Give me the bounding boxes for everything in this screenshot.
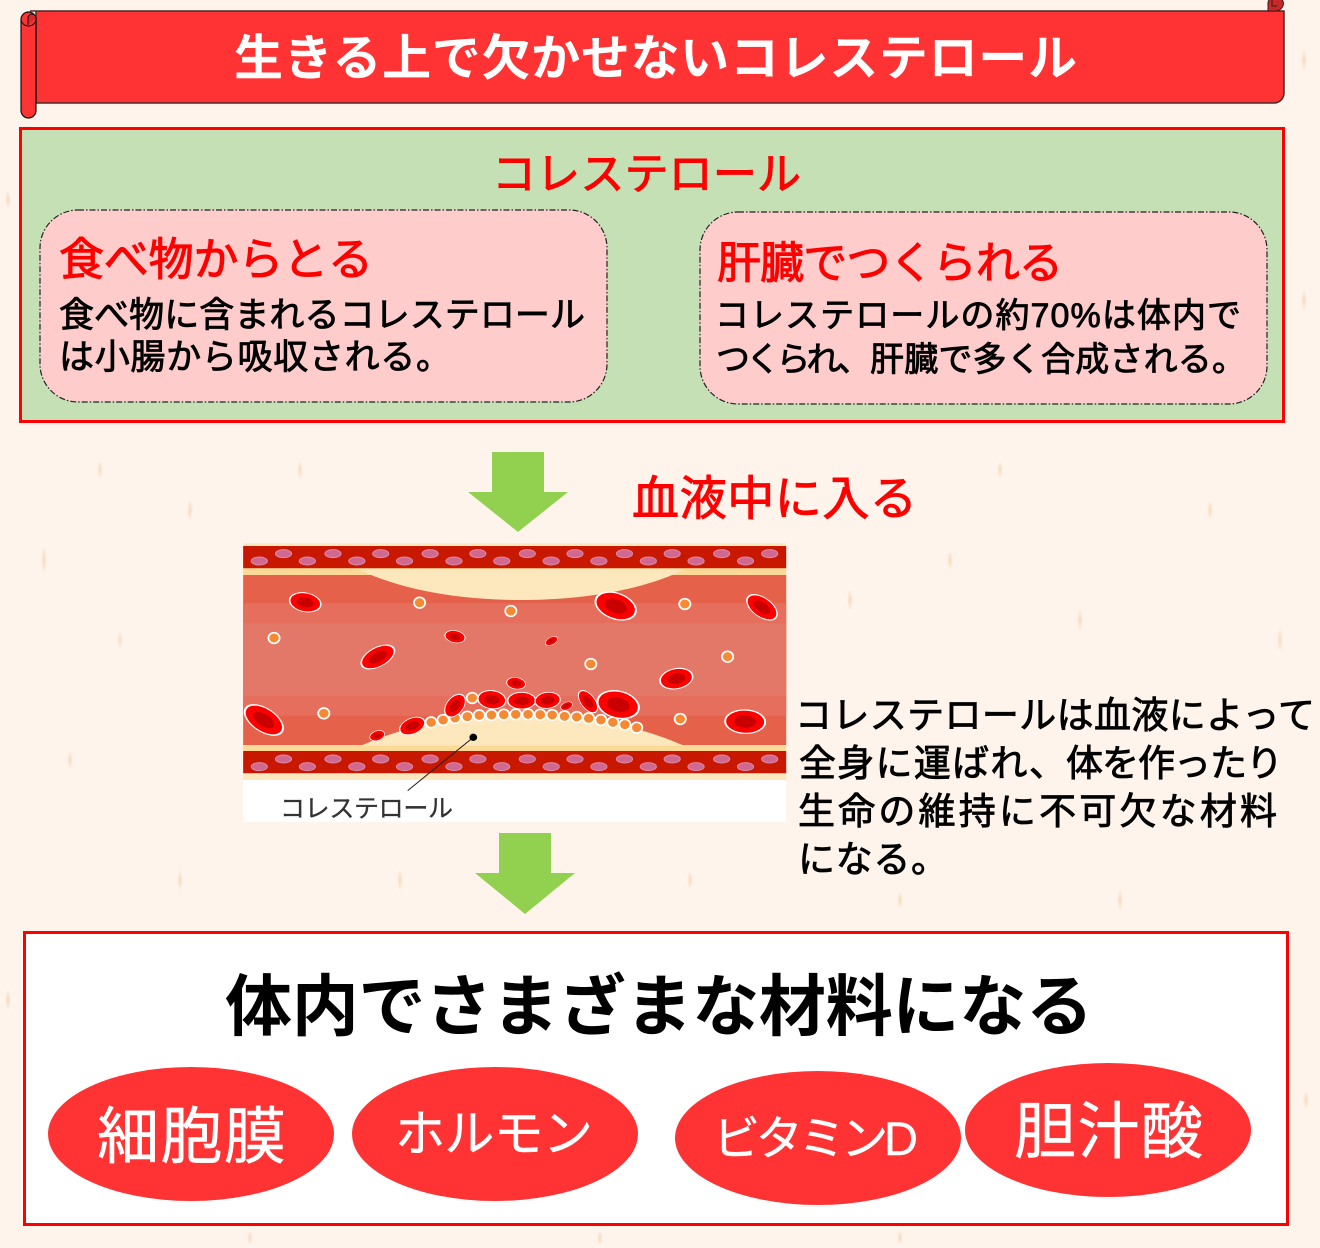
card heading: 肝臓でつくられる bbox=[717, 239, 1063, 288]
leader line and dot bbox=[408, 734, 477, 791]
side explanation text: 体を作ったり bbox=[1066, 743, 1283, 784]
heading: enters the blood: 血液中に入る bbox=[632, 472, 917, 525]
oval: bile acid: 胆汁酸 bbox=[1014, 1098, 1203, 1167]
oval: vitamin D: ビタミンD bbox=[713, 1112, 918, 1165]
green panel background bbox=[20, 128, 1284, 422]
illustration label: コレステロール bbox=[280, 795, 453, 823]
artery illustration bbox=[239, 543, 786, 823]
card body bbox=[715, 297, 1246, 379]
card body: 肝臓で多く合成される。 bbox=[870, 341, 1246, 379]
panel: materials bbox=[24, 932, 1288, 1224]
white panel background bbox=[24, 932, 1288, 1224]
side explanation text: になる。 bbox=[798, 839, 948, 880]
arrow: down to blood bbox=[468, 452, 568, 532]
card: from food bbox=[40, 210, 607, 402]
card body bbox=[59, 296, 585, 377]
oval: hormones bbox=[352, 1067, 638, 1201]
right scroll curl bbox=[1268, 0, 1284, 11]
card body: 食べ物に含まれるコレステロール bbox=[59, 296, 585, 335]
title banner bbox=[21, 0, 1284, 118]
orange cholesterol particles bbox=[268, 597, 733, 733]
oval: cell membrane: 細胞膜 bbox=[97, 1103, 286, 1172]
card heading: 食べ物からとる bbox=[59, 234, 373, 285]
card body: は小腸から吸収される。 bbox=[59, 338, 451, 377]
side explanation text: 生命の維持に不可欠な材料 bbox=[798, 791, 1277, 832]
panel heading: 体内でさまざまな材料になる bbox=[225, 970, 1093, 1045]
image backing bbox=[243, 545, 786, 822]
panel heading: コレステロール bbox=[492, 150, 801, 199]
oval: cell membrane bbox=[48, 1067, 334, 1201]
card: made in liver bbox=[700, 212, 1267, 404]
side explanation text: コレステロールは血液によって bbox=[795, 695, 1315, 736]
panel: cholesterol sources bbox=[20, 128, 1284, 422]
red blood cells bbox=[239, 587, 782, 743]
top plaque bbox=[358, 569, 686, 600]
title text: 生きる上で欠かせないコレステロール bbox=[234, 32, 1077, 86]
bottom plaque bbox=[361, 715, 684, 746]
oval: hormones: ホルモン bbox=[395, 1106, 593, 1162]
arrow: down to materials bbox=[475, 833, 575, 914]
card body: つくられ、 bbox=[716, 341, 871, 379]
oval: bile acid bbox=[965, 1063, 1251, 1197]
vessel wall cells bbox=[251, 550, 778, 771]
banner ribbon bbox=[30, 11, 1284, 103]
card body: コレステロールの約70%は体内で bbox=[715, 297, 1241, 335]
side explanation text: 全身に運ばれ、 bbox=[799, 743, 1066, 784]
left scroll roll bbox=[21, 12, 36, 118]
side explanation text bbox=[795, 695, 1315, 880]
oval: vitamin D bbox=[675, 1071, 961, 1205]
